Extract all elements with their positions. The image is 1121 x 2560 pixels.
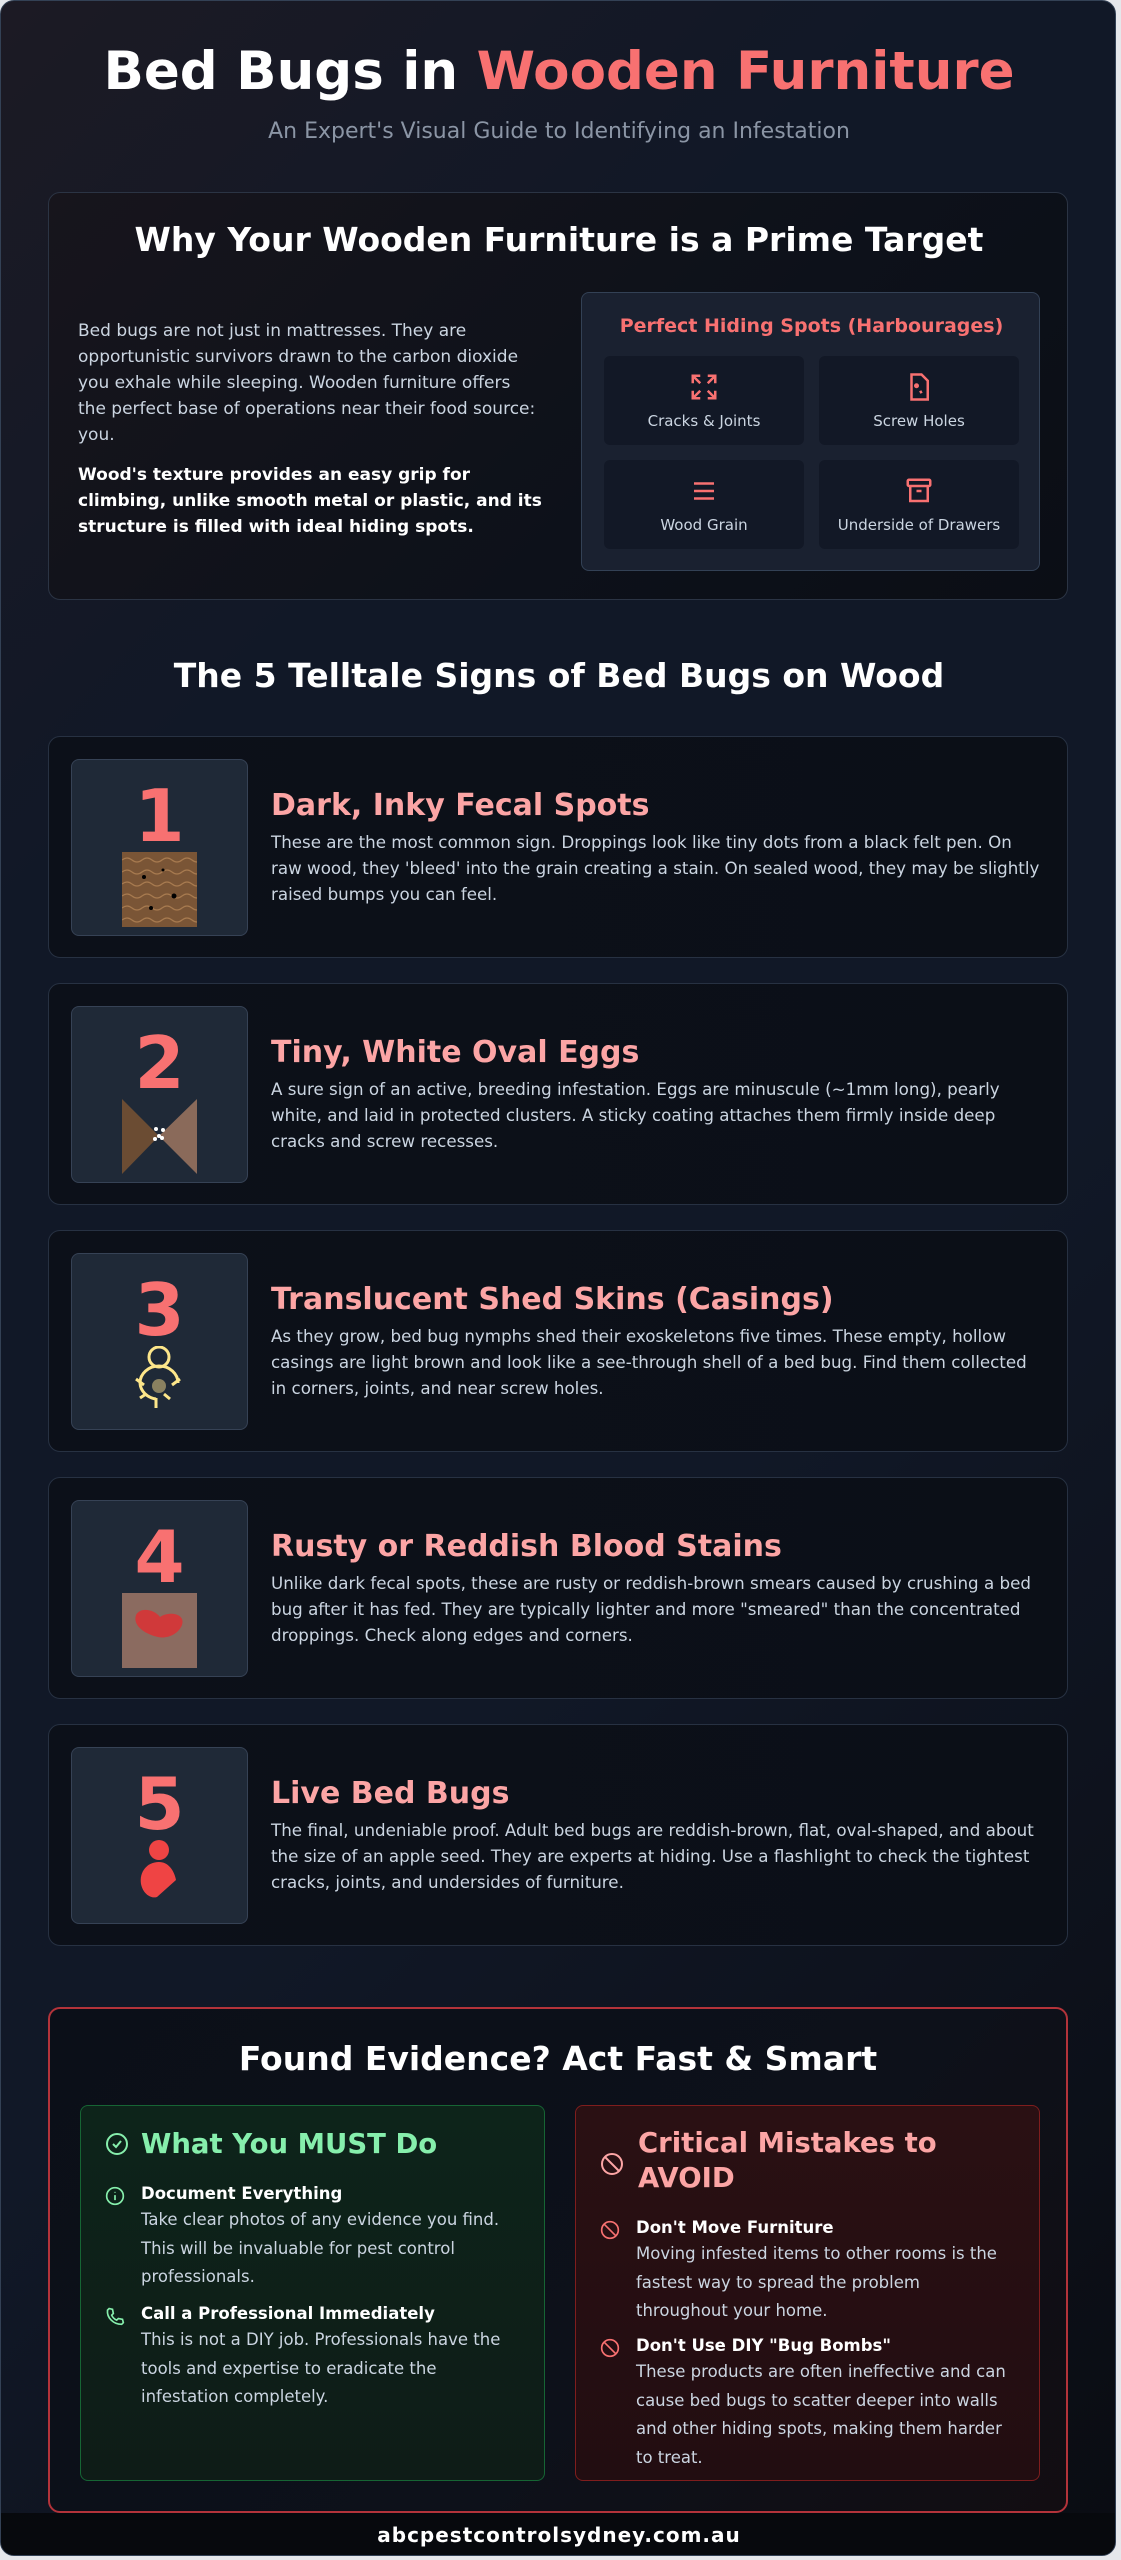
panel: act fast [48, 2007, 1068, 2513]
text: sign 4: Unlike dark fecal spots, these are rusty or reddish-brown smears caused by crushing a bed bug after it has fed. They are typically lighter and more "smeared" than the concentrated droppings. Check along edges and corners. [271, 1573, 1031, 1645]
text: sign 3: As they grow, bed bug nymphs shed their exoskeletons five times. These empty, hollow casings are light brown and look like a see-through shell of a bed bug. Find them collected in corners, joints, and near screw holes. [271, 1326, 1027, 1398]
text: sign 1: Dark, Inky Fecal Spots [271, 788, 649, 823]
card: sign 5 [48, 1724, 1068, 1946]
icon: live bug [71, 1747, 248, 1924]
text: sign 2 [271, 1035, 1000, 1151]
heading: act fast: Found Evidence? Act Fast & Smart [239, 2039, 877, 2078]
heading: mistakes: Critical Mistakes to AVOID [638, 2127, 937, 2194]
title: Bed Bugs in Wooden Furniture [103, 41, 1015, 102]
heading: why: Why Your Wooden Furniture is a Prime Target [135, 220, 983, 259]
card: sign 4 [48, 1477, 1068, 1699]
text: sign 3: Translucent Shed Skins (Casings) [271, 1282, 834, 1317]
icon: fecal spots [71, 759, 248, 936]
item: don't move: Moving infested items to other rooms is the fastest way to spread the problem throughout your home. [636, 2244, 997, 2320]
item: bug bombs: These products are often ineffective and can cause bed bugs to scatter deeper into walls and other hiding spots, making them harder to treat. [636, 2362, 1006, 2466]
card: sign 3 [48, 1230, 1068, 1452]
tile: cracks: Cracks & Joints [648, 412, 760, 430]
panel: why wooden furniture [48, 192, 1068, 600]
tile: wood grain: Wood Grain [660, 516, 748, 534]
text: sign 2: A sure sign of an active, breeding infestation. Eggs are minuscule (~1mm long), pearly white, and laid in protected clusters. A sticky coating attaches them firmly inside deep cracks and screw recesses. [271, 1079, 1000, 1151]
icon: live bug: 5 [134, 1762, 185, 1846]
icon: shed skin: 3 [134, 1268, 185, 1352]
icon: blood stain: 4 [134, 1515, 185, 1599]
footer [1, 2513, 1117, 2557]
item: call professional: This is not a DIY job. Professionals have the tools and expertise to eradicate the infestation completely. [141, 2330, 500, 2406]
tile: screw holes: Screw Holes [873, 412, 965, 430]
footer: abcpestcontrolsydney.com.au [377, 2523, 741, 2547]
card: sign 2 [48, 983, 1068, 1205]
item: call professional: Call a Professional Immediately [141, 2304, 435, 2323]
icon: eggs [71, 1006, 248, 1183]
text block: intro: Wood's texture provides an easy grip for climbing, unlike smooth metal or plastic, and its structure is filled with ideal hiding spots. [78, 465, 542, 537]
tile: drawers [819, 460, 1019, 549]
tile: drawers: Underside of Drawers [838, 516, 1000, 534]
text: sign 5: The final, undeniable proof. Adult bed bugs are reddish-brown, flat, oval-shaped, and about the size of an apple seed. They are experts at hiding. Use a flashlight to check the tightest cracks, joints, and undersides of furniture. [271, 1820, 1034, 1892]
heading: hiding spots: Perfect Hiding Spots (Harbourages) [620, 315, 1003, 337]
text block: intro [78, 321, 542, 537]
text block: intro: Bed bugs are not just in mattresses. They are opportunistic survivors drawn to the carbon dioxide you exhale while sleeping. Wooden furniture offers the perfect base of operations near their food source: you. [78, 321, 535, 445]
text: sign 4: Rusty or Reddish Blood Stains [271, 1529, 782, 1564]
text: sign 3 [271, 1282, 1027, 1398]
tile: wood grain [604, 460, 804, 549]
item: don't move [600, 2218, 997, 2320]
heading: 5 signs: The 5 Telltale Signs of Bed Bugs on Wood [174, 656, 944, 695]
heading: must do: What You MUST Do [141, 2128, 437, 2160]
panel: must do [80, 2105, 545, 2481]
icon: shed skin [71, 1253, 248, 1430]
item: don't move: Don't Move Furniture [636, 2218, 834, 2237]
subtitle: An Expert's Visual Guide to Identifying an Infestation [268, 119, 850, 144]
item: call professional [106, 2304, 500, 2406]
text: sign 1 [270, 788, 1039, 904]
text: sign 4 [271, 1529, 1031, 1645]
text: sign 1: These are the most common sign. Droppings look like tiny dots from a black felt pen. On raw wood, they 'bleed' into the grain creating a stain. On sealed wood, they may be slightly raised bumps you can feel. [271, 832, 1039, 904]
panel: hiding spots [581, 292, 1040, 571]
card: sign 1 [48, 736, 1068, 958]
item: bug bombs: Don't Use DIY "Bug Bombs" [636, 2336, 891, 2355]
panel: mistakes [575, 2105, 1040, 2481]
text: sign 2: Tiny, White Oval Eggs [271, 1035, 639, 1070]
text: sign 5: Live Bed Bugs [271, 1776, 509, 1811]
item: document: Take clear photos of any evidence you find. This will be invaluable for pest control professionals. [141, 2210, 499, 2286]
icon: blood stain [71, 1500, 248, 1677]
tile: cracks [604, 356, 804, 445]
icon: fecal spots: 1 [134, 774, 185, 858]
item: document [106, 2184, 499, 2286]
text: sign 5 [270, 1776, 1034, 1892]
icon: eggs: 2 [134, 1021, 185, 1105]
tile: screw holes [819, 356, 1019, 445]
item: document: Document Everything [141, 2184, 342, 2203]
